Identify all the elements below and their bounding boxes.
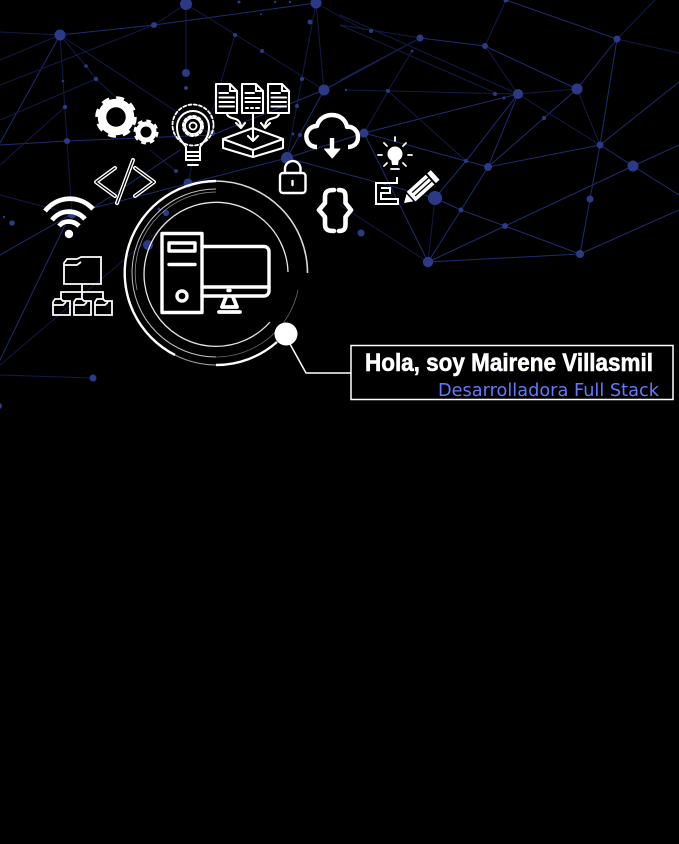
role subtitle: Desarrolladora Full Stack xyxy=(438,381,660,401)
icon: cloud download xyxy=(306,115,358,158)
name heading: Hola, soy Mairene Villasmil xyxy=(365,349,653,377)
icon: documents into box xyxy=(216,84,289,157)
callout: name and role xyxy=(351,346,673,401)
icon: code brackets xyxy=(96,160,154,203)
icon: wifi xyxy=(45,199,93,238)
icon: gears xyxy=(98,99,156,142)
pencil xyxy=(400,170,440,208)
callout connector xyxy=(274,322,351,373)
icon: idea and pencil xyxy=(376,137,440,208)
icon: folder hierarchy xyxy=(53,257,112,315)
icon: padlock xyxy=(280,161,306,193)
rings xyxy=(125,181,308,365)
central ring with computer xyxy=(125,181,308,365)
network background: nodes xyxy=(0,0,638,409)
icon: desktop computer xyxy=(162,234,269,312)
network background: connection lines xyxy=(0,0,679,378)
icon: light bulb with gear xyxy=(172,104,214,165)
icon: curly braces xyxy=(319,190,351,231)
